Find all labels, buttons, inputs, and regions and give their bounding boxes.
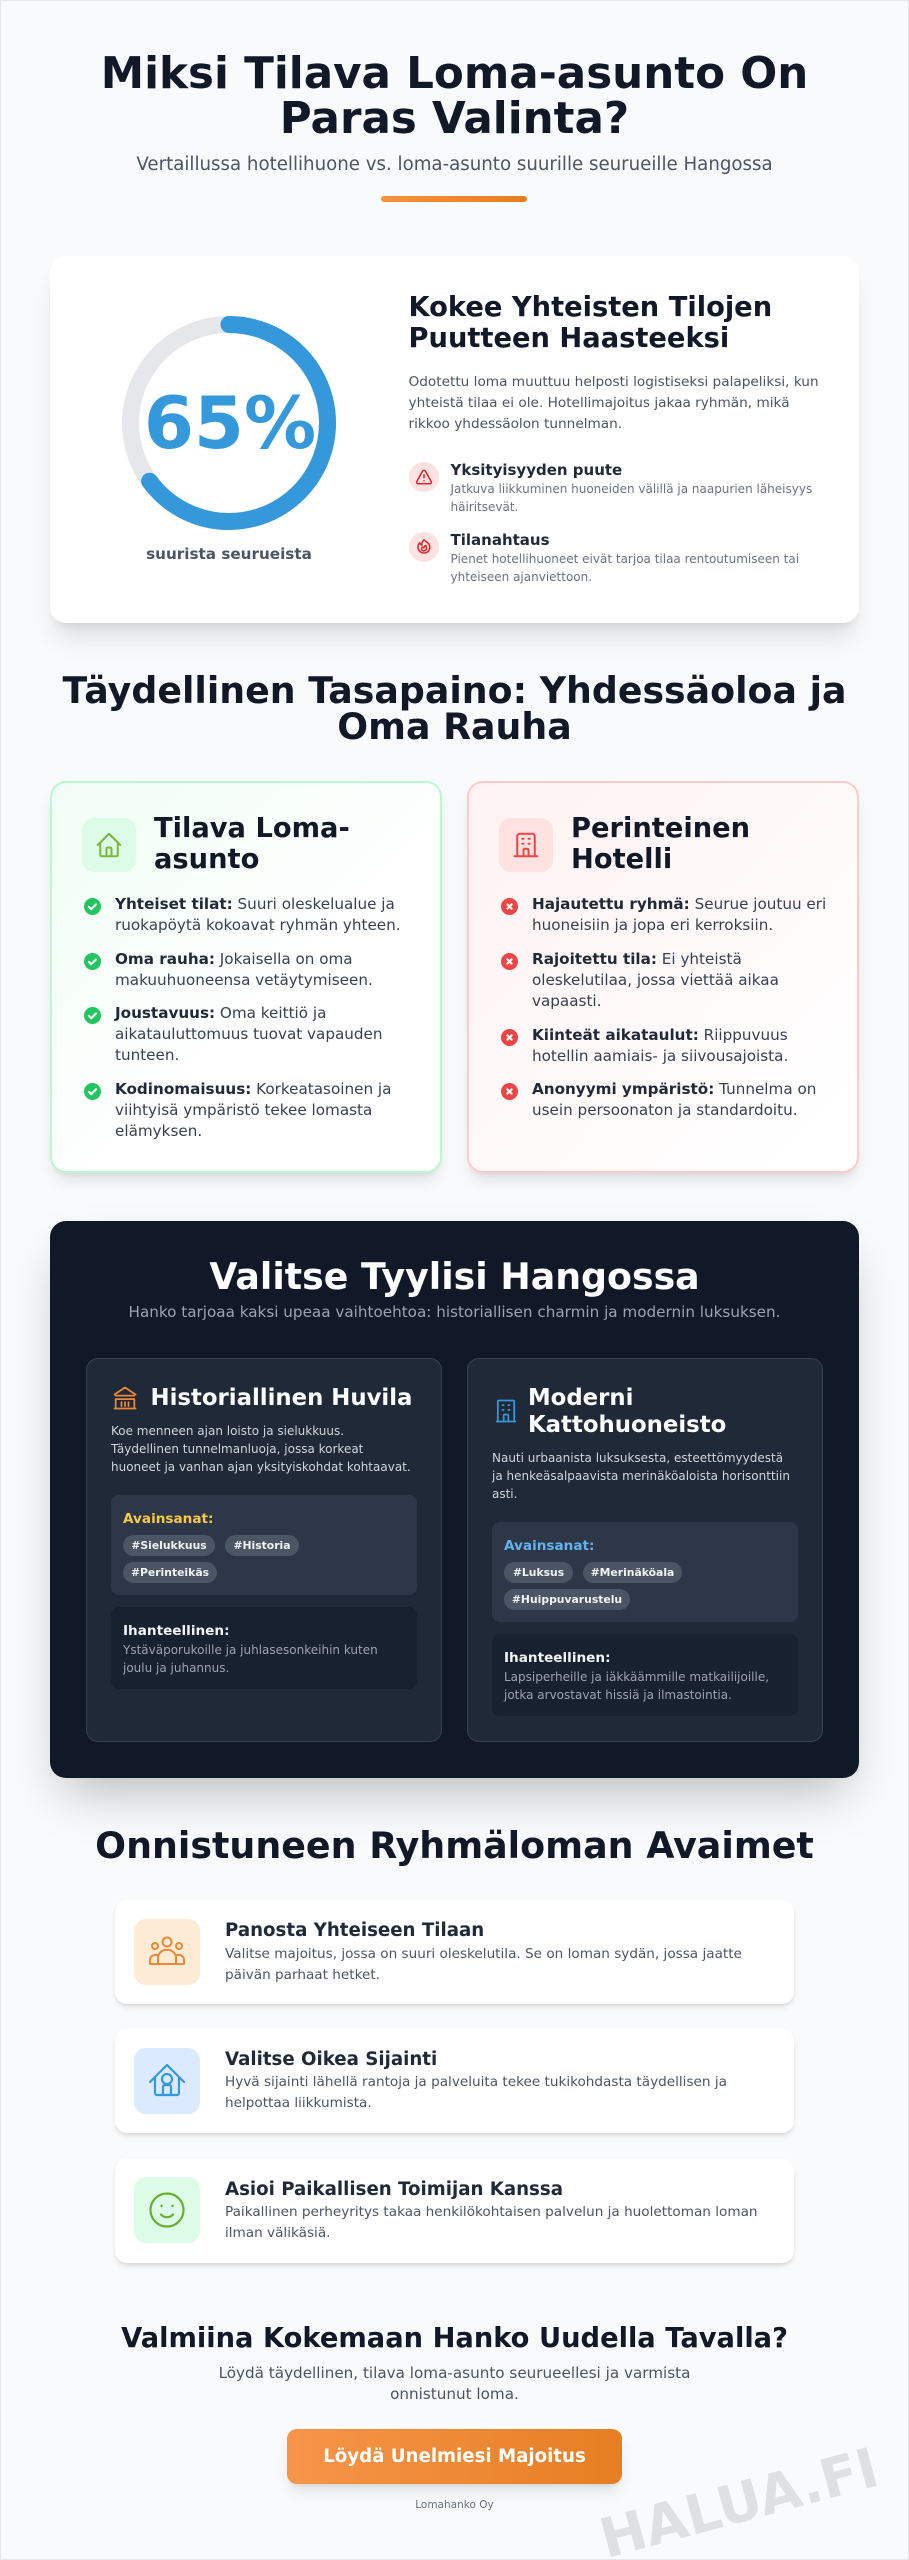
heading: asunto — [154, 844, 259, 874]
tip text: Valitse majoitus, jossa on suuri oleskelutila. Se on loman sydän, jossa jaatte — [225, 1946, 742, 1962]
section heading: balance — [62, 669, 847, 748]
section heading: balance: Täydellinen Tasapaino: Yhdessäoloa ja — [62, 669, 847, 712]
subtitle: Vertaillussa hotellihuone vs. loma-asunto suurille seurueille Hangossa — [136, 154, 773, 175]
check icon — [84, 953, 101, 970]
tag — [123, 1535, 215, 1556]
paragraph: yhteistä tilaa ei ole. Hotellimajoitus jakaa ryhmän, mikä — [408, 394, 790, 410]
benefit text: aikatauluttomuus tuovat vapauden — [115, 1025, 383, 1043]
call to action text — [219, 2364, 690, 2403]
item: space title: Tilanahtaus — [450, 531, 550, 549]
benefit text: Kodinomaisuus: Korkeatasoinen ja — [115, 1080, 391, 1098]
tag: #Merinäköala — [591, 1566, 674, 1579]
section heading: balance: Oma Rauha — [337, 705, 572, 748]
icon: home — [82, 818, 136, 872]
accent bar — [381, 196, 527, 202]
subheading: Hanko tarjoaa kaksi upeaa vaihtoehtoa: historiallisen charmin ja modernin luksuksen. — [129, 1303, 780, 1321]
benefit text — [115, 1080, 391, 1140]
tip text — [225, 2204, 758, 2241]
tag: #Historia — [233, 1539, 291, 1552]
icon: historic building — [114, 1386, 136, 1410]
cross icon — [501, 953, 518, 970]
icon: flame — [409, 532, 439, 562]
check icon — [84, 1007, 101, 1024]
card text — [110, 1424, 411, 1474]
benefit text: Yhteiset tilat: Suuri oleskelualue ja — [115, 895, 395, 913]
heading — [408, 292, 772, 354]
card text: huoneet ja vanhan ajan yksityiskohdat kohtaavat. — [111, 1460, 411, 1474]
heading: Valitse Tyylisi Hangossa — [209, 1254, 700, 1298]
cross icon — [501, 1029, 518, 1046]
keywords label: Avainsanat: — [123, 1511, 213, 1527]
ideal-for label: Ihanteellinen: — [123, 1623, 230, 1639]
panel: challenge stat — [50, 256, 859, 623]
tag — [225, 1535, 299, 1556]
tag — [583, 1562, 682, 1583]
stat value: 65% — [144, 381, 316, 465]
tag: #Sielukkuus — [131, 1539, 207, 1552]
drawback text — [532, 895, 826, 934]
title: Miksi Tilava Loma-asunto On — [101, 48, 808, 98]
keywords box — [492, 1522, 798, 1622]
ideal-for text: Ystäväporukoille ja juhlasesonkeihin kuten — [123, 1643, 378, 1657]
ideal-for label: Ihanteellinen: — [504, 1650, 611, 1666]
tip card: local operator — [115, 2159, 794, 2263]
card heading: Historiallinen Huvila — [150, 1385, 412, 1411]
icon: warning — [409, 462, 439, 492]
keywords box — [111, 1495, 417, 1595]
tag: #Luksus — [513, 1566, 564, 1579]
panel: choose your style — [50, 1221, 859, 1778]
list: drawbacks — [501, 895, 826, 1119]
paragraph: rikkoo yhdessäolon tunnelman. — [408, 416, 622, 432]
item: space description: yhteiseen ajanviettoon. — [450, 570, 592, 584]
card: historic villa — [86, 1358, 442, 1742]
benefit text — [114, 895, 401, 934]
ideal-for text: jotka arvostavat hissiä ja ilmastointia. — [504, 1688, 732, 1702]
cross icon — [501, 1083, 518, 1100]
drawback text — [532, 1026, 788, 1065]
ideal-for text: Lapsiperheille ja iäkkäämmille matkailijoille, — [504, 1670, 769, 1684]
drawback text: Hajautettu ryhmä: Seurue joutuu eri — [532, 895, 826, 913]
ideal-for box — [492, 1634, 798, 1716]
tip text: Paikallinen perheyritys takaa henkilökohtaisen palvelun ja huolettoman loman — [225, 2204, 758, 2220]
item: privacy title: Yksityisyyden puute — [450, 461, 622, 479]
item: privacy description: häiritsevät. — [450, 500, 518, 514]
card: modern penthouse — [467, 1358, 823, 1742]
benefit text: ruokapöytä kokoavat ryhmän yhteen. — [115, 916, 401, 934]
benefit text — [115, 950, 373, 988]
tip title: Panosta Yhteiseen Tilaan — [225, 1920, 484, 1941]
call to action button: Löydä Unelmiesi Majoitus — [323, 2446, 586, 2467]
stat caption: suurista seurueista — [146, 545, 312, 563]
card text: Täydellinen tunnelmanluoja, jossa korkeat — [111, 1442, 363, 1456]
card heading: Moderni — [528, 1385, 633, 1411]
drawback text — [532, 1080, 816, 1119]
footer: Lomahanko Oy — [415, 2499, 494, 2511]
title: Paras Valinta? — [280, 94, 629, 144]
call to action button — [287, 2429, 622, 2484]
donut chart 65% — [122, 316, 336, 530]
benefit text: elämyksen. — [115, 1122, 202, 1140]
tip text: helpottaa liikkumista. — [225, 2095, 372, 2111]
heading: Puutteen Haasteeksi — [408, 323, 729, 354]
panel: traditional hotel — [467, 781, 859, 1173]
card heading — [528, 1385, 726, 1438]
icon: house with pin — [134, 2048, 200, 2114]
card text — [492, 1450, 790, 1501]
ideal-for text — [122, 1643, 378, 1675]
tag: #Perinteikäs — [131, 1566, 209, 1579]
call to action heading: Valmiina Kokemaan Hanko Uudella Tavalla? — [121, 2323, 788, 2354]
item: space description: Pienet hotellihuoneet eivät tarjoa tilaa rentoutumiseen tai — [450, 552, 799, 566]
heading: Tilava Loma- — [154, 813, 350, 844]
heading: Perinteinen — [571, 813, 750, 844]
drawback text — [532, 950, 779, 1010]
heading: Kokee Yhteisten Tilojen — [408, 292, 772, 323]
drawback text: hotellin aamiais- ja siivousajoista. — [532, 1047, 788, 1065]
tip text: Hyvä sijainti lähellä rantoja ja palveluita tekee tukikohdasta täydellisen ja — [225, 2074, 727, 2090]
tip card: location — [115, 2029, 794, 2133]
section heading: keys to success: Onnistuneen Ryhmäloman Avaimet — [95, 1824, 814, 1867]
icon: group — [134, 1919, 200, 1985]
icon: modern building — [496, 1400, 516, 1422]
icon: hotel building — [499, 818, 553, 872]
tag: #Huippuvarustelu — [512, 1593, 622, 1606]
paragraph — [408, 374, 819, 432]
heading — [154, 813, 350, 874]
paragraph: Odotettu loma muuttuu helposti logistiseksi palapeliksi, kun — [408, 374, 819, 390]
card heading: Kattohuoneisto — [528, 1412, 726, 1438]
call to action text: Löydä täydellinen, tilava loma-asunto seurueellesi ja varmista — [219, 2364, 690, 2382]
tip text: päivän parhaat hetket. — [225, 1967, 380, 1983]
benefit text: makuuhuoneensa vetäytymiseen. — [115, 970, 373, 988]
cross icon — [501, 898, 518, 915]
tag — [504, 1589, 630, 1610]
tag — [123, 1562, 217, 1583]
tip title: Asioi Paikallisen Toimijan Kanssa — [225, 2179, 563, 2200]
item: privacy description: Jatkuva liikkuminen huoneiden välillä ja naapurien läheisyys — [450, 482, 812, 496]
drawback text: usein persoonaton ja standardoitu. — [532, 1101, 798, 1119]
card text: Nauti urbaanista luksuksesta, esteettömyydestä — [492, 1450, 783, 1464]
ideal-for text: joulu ja juhannus. — [123, 1661, 229, 1675]
heading — [571, 813, 750, 874]
check icon — [84, 1083, 101, 1100]
list: benefits — [84, 895, 401, 1140]
tip title: Valitse Oikea Sijainti — [225, 2049, 437, 2070]
icon: smile — [134, 2177, 200, 2243]
card text: Koe menneen ajan loisto ja sielukkuus. — [111, 1424, 344, 1438]
card text: asti. — [492, 1487, 517, 1501]
drawback text: huoneisiin ja jopa eri kerroksiin. — [532, 916, 773, 934]
card text: ja henkeäsalpaavista merinäköaloista horisonttiin — [492, 1469, 790, 1483]
tip text — [225, 2074, 727, 2111]
ideal-for box — [111, 1607, 417, 1689]
tip text: ilman välikäsiä. — [225, 2225, 330, 2241]
heading: Hotelli — [571, 844, 672, 874]
keywords label: Avainsanat: — [504, 1538, 594, 1554]
check icon — [84, 898, 101, 915]
drawback text: Anonyymi ympäristö: Tunnelma on — [532, 1080, 816, 1098]
ideal-for text — [504, 1670, 769, 1702]
drawback text: oleskelutilaa, jossa viettää aikaa — [532, 970, 779, 988]
benefit text — [114, 1004, 383, 1064]
title — [101, 48, 808, 144]
item: space description — [450, 552, 799, 584]
benefit text: viihtyisä ympäristö tekee lomasta — [115, 1101, 372, 1119]
panel: vacation home — [50, 781, 442, 1173]
benefit text: Joustavuus: Oma keittiö ja — [115, 1004, 326, 1022]
drawback text: Rajoitettu tila: Ei yhteistä — [532, 950, 742, 968]
benefit text: Oma rauha: Jokaisella on oma — [115, 950, 353, 968]
tag — [504, 1562, 573, 1583]
drawback text: Kiinteät aikataulut: Riippuvuus — [532, 1026, 788, 1044]
call to action text: onnistunut loma. — [390, 2385, 519, 2403]
item: privacy description — [450, 482, 812, 514]
benefit text: tunteen. — [115, 1046, 179, 1064]
drawback text: vapaasti. — [532, 992, 601, 1010]
tip text — [225, 1946, 742, 1983]
tip card: shared space — [115, 1900, 794, 2004]
